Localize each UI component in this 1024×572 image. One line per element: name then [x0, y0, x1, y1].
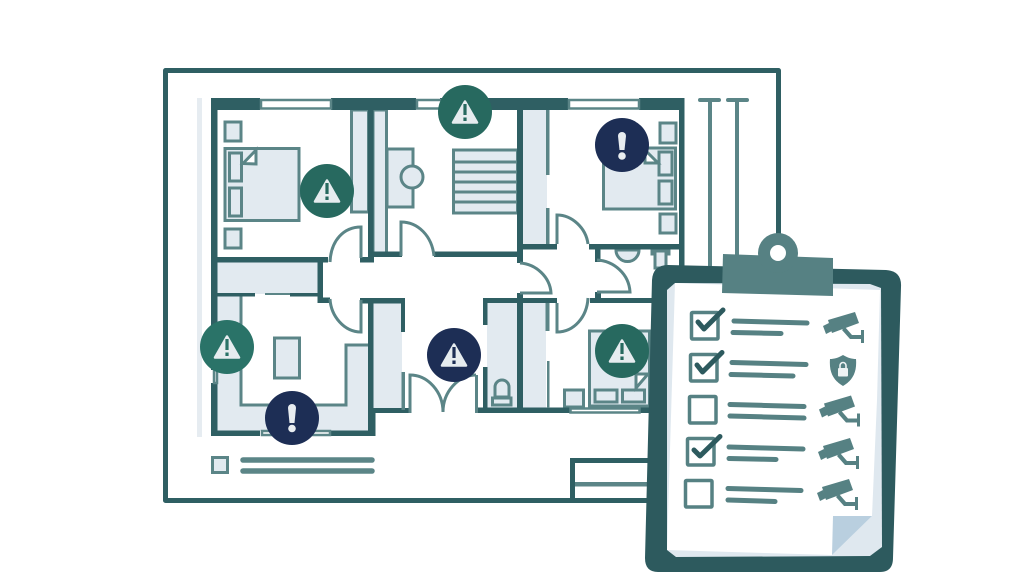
marker: warning left wall — [200, 320, 254, 374]
checklist row 2 — [690, 352, 856, 386]
checklist row 3 — [690, 396, 860, 426]
bedroom two furniture — [604, 123, 676, 233]
bedroom three furniture — [564, 331, 650, 407]
checklist row 4 — [688, 436, 859, 469]
lower-left table — [274, 338, 300, 378]
marker: alert bottom wall — [265, 391, 319, 445]
clipboard board — [645, 265, 901, 572]
top sheet — [667, 283, 880, 555]
thin partitions — [265, 110, 550, 413]
dark structural walls — [211, 98, 684, 436]
stairs — [453, 150, 518, 213]
pale closets and built-ins — [217, 110, 547, 431]
corner fold — [832, 516, 872, 555]
left margin strip — [197, 98, 202, 437]
bedroom one furniture — [225, 122, 299, 248]
windows — [214, 100, 640, 435]
toilet lower — [492, 380, 511, 405]
marker: warning top left room — [300, 164, 354, 218]
marker: warning top wall — [438, 85, 492, 139]
floor plan — [211, 98, 684, 436]
checklist row 1 — [692, 310, 864, 343]
marker: alert top right room — [595, 118, 649, 172]
legend: key square and lines — [212, 458, 372, 472]
clip plate — [722, 254, 833, 296]
icon: shield with lock — [830, 355, 856, 386]
clip ring — [758, 233, 798, 273]
back sheet — [667, 283, 882, 557]
door swings — [330, 215, 630, 413]
dimension lines — [700, 100, 747, 270]
clipboard — [645, 233, 901, 572]
bathroom fixtures upper — [616, 250, 669, 268]
title block — [570, 458, 652, 503]
checklist row 5 — [686, 479, 858, 510]
marker: warning entrance — [427, 328, 481, 382]
marker: warning lower right room — [595, 324, 649, 378]
blueprint sheet frame — [166, 70, 778, 500]
desk and chair — [387, 149, 423, 207]
